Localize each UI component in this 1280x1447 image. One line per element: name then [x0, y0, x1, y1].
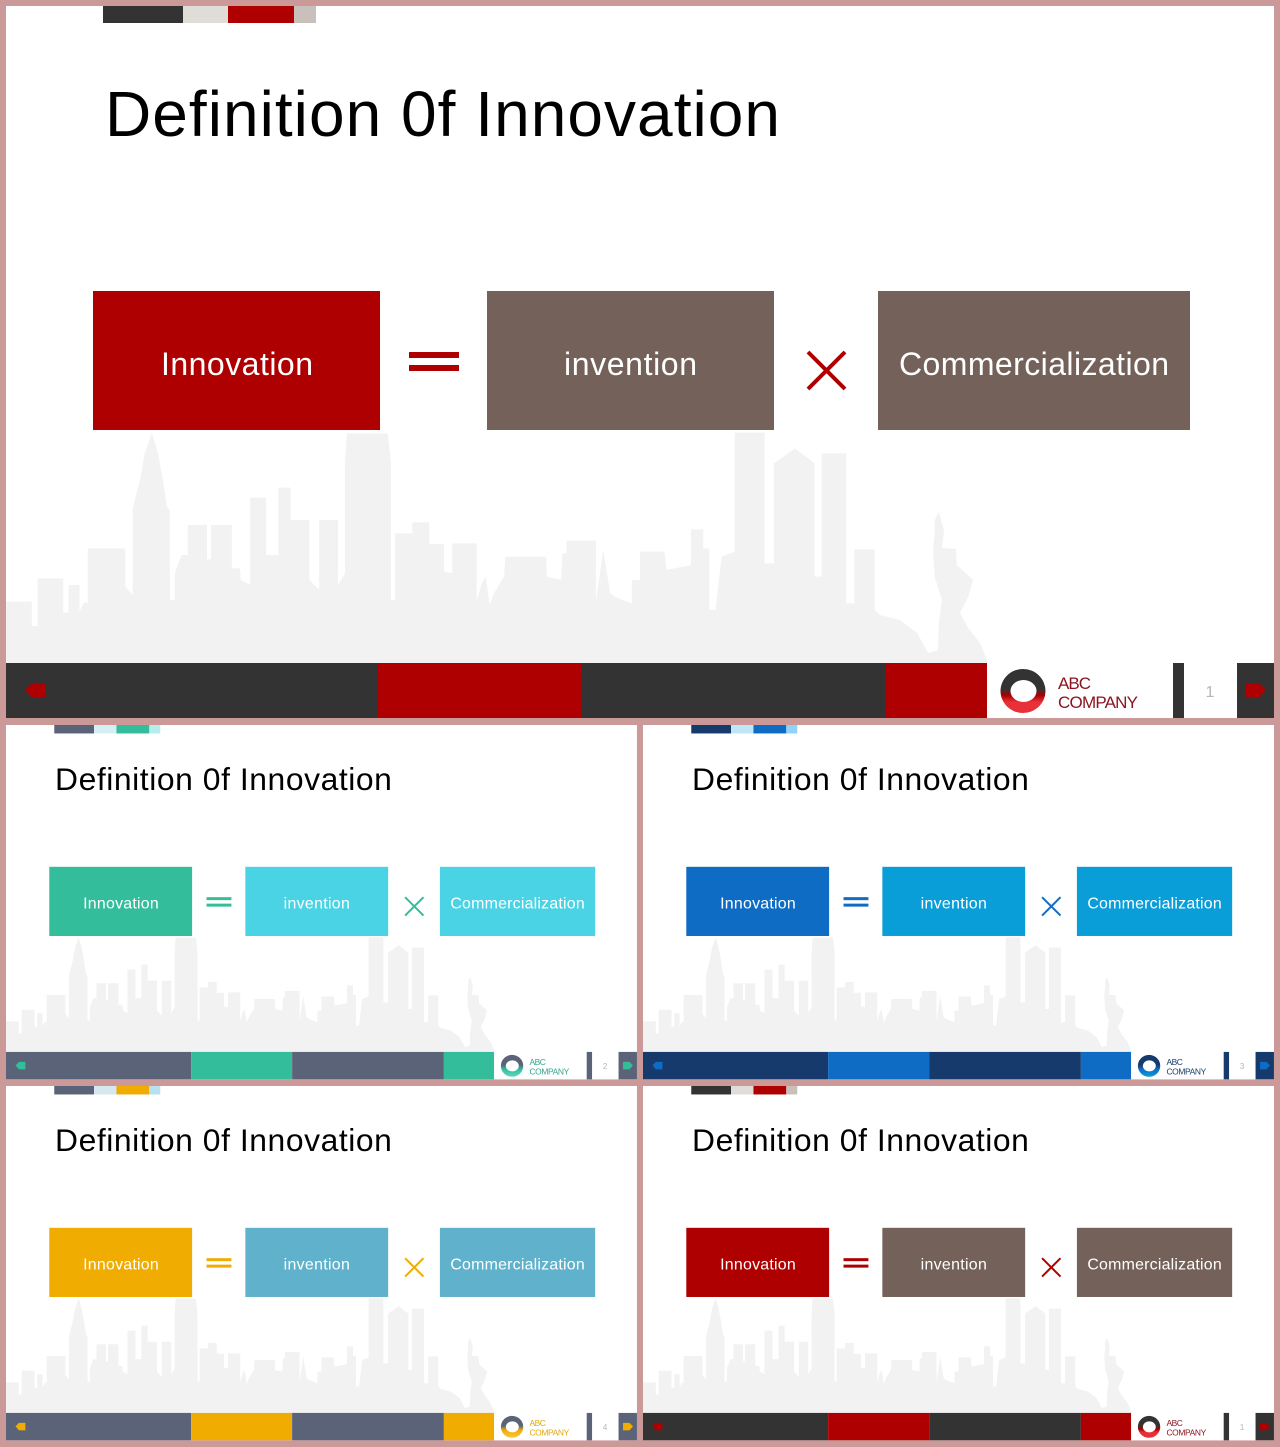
box: Commercialization: Commercialization: [450, 1257, 585, 1274]
box: Innovation: [49, 1228, 192, 1297]
title: Definition 0f Innovation: [105, 78, 780, 150]
box: Commercialization: [1077, 1228, 1232, 1297]
box: invention: invention: [284, 1257, 350, 1274]
box: invention: invention: [921, 896, 987, 913]
icon: multiply: [808, 352, 845, 389]
box: Commercialization: [440, 1228, 595, 1297]
top colour tab: [103, 6, 316, 23]
icon: company ring: [501, 1416, 523, 1438]
company name: [529, 1057, 570, 1076]
icon: left arrow: [15, 1062, 25, 1069]
top colour tab: [691, 1086, 797, 1094]
box: Commercialization: [440, 867, 595, 936]
box: Innovation: Innovation: [83, 1257, 159, 1274]
icon: left arrow: [15, 1423, 25, 1430]
box: Commercialization: [878, 291, 1190, 430]
skyline silhouette: [643, 937, 1132, 1052]
company name: COMPANY: [529, 1427, 570, 1437]
company name: [1058, 674, 1138, 712]
panel: thumbnail slide 4 (gold): [6, 1086, 637, 1440]
company name: [1166, 1418, 1207, 1437]
footer bar: [6, 663, 1274, 718]
footer bar: [6, 1413, 637, 1440]
box: Innovation: Innovation: [720, 896, 796, 913]
company name: COMPANY: [1166, 1066, 1207, 1076]
icon: multiply: [405, 1258, 423, 1277]
box: Innovation: [49, 867, 192, 936]
box: Commercialization: [1077, 867, 1232, 936]
page number: 3: [1240, 1062, 1245, 1071]
page number: 1: [1240, 1423, 1245, 1432]
top colour tab: [691, 725, 797, 733]
box: invention: invention: [921, 1257, 987, 1274]
box: Commercialization: Commercialization: [899, 346, 1169, 382]
icon: company ring: [1138, 1055, 1160, 1077]
company name: [529, 1418, 570, 1437]
icon: left arrow: [25, 683, 45, 698]
icon: equals: [409, 352, 459, 371]
icon: equals: [844, 897, 868, 907]
company name: [1166, 1057, 1207, 1076]
icon: left arrow: [652, 1423, 662, 1430]
icon: left arrow: [652, 1062, 662, 1069]
title: Definition 0f Innovation: [692, 761, 1029, 797]
icon: right arrow: [1260, 1423, 1270, 1430]
box: invention: [245, 1228, 388, 1297]
icon: right arrow: [623, 1423, 633, 1430]
box: Innovation: Innovation: [83, 896, 159, 913]
box: invention: invention: [284, 896, 350, 913]
footer bar: [643, 1413, 1274, 1440]
icon: right arrow: [1246, 683, 1266, 698]
company name: COMPANY: [529, 1066, 570, 1076]
top colour tab: [54, 1086, 160, 1094]
icon: equals: [207, 1258, 231, 1268]
box: invention: invention: [564, 346, 697, 382]
box: invention: [882, 1228, 1025, 1297]
company name: ABC: [529, 1418, 546, 1428]
icon: equals: [844, 1258, 868, 1268]
company name: COMPANY: [1166, 1427, 1207, 1437]
company name: COMPANY: [1058, 693, 1138, 712]
icon: multiply: [1042, 897, 1060, 916]
skyline silhouette: [6, 433, 988, 663]
box: invention: [245, 867, 388, 936]
title: Definition 0f Innovation: [692, 1122, 1029, 1158]
page number: 1: [1206, 684, 1215, 701]
company name: ABC: [1166, 1057, 1183, 1067]
panel: thumbnail slide 3 (blue): [643, 725, 1274, 1079]
icon: company ring: [501, 1055, 523, 1077]
box: invention: [487, 291, 774, 430]
company name: ABC: [529, 1057, 546, 1067]
box: Commercialization: Commercialization: [450, 896, 585, 913]
footer bar: [643, 1052, 1274, 1079]
page number: 2: [603, 1062, 608, 1071]
box: Commercialization: Commercialization: [1087, 1257, 1222, 1274]
icon: right arrow: [623, 1062, 633, 1069]
box: Innovation: [686, 1228, 829, 1297]
box: invention: [882, 867, 1025, 936]
box: Innovation: Innovation: [161, 346, 313, 382]
box: Innovation: Innovation: [720, 1257, 796, 1274]
company name: ABC: [1166, 1418, 1183, 1428]
panel: main slide (red): [6, 6, 1274, 718]
icon: company ring: [1000, 669, 1046, 713]
icon: company ring: [1138, 1416, 1160, 1438]
skyline silhouette: [643, 1298, 1132, 1413]
panel: thumbnail slide 5 (red): [643, 1086, 1274, 1440]
company name: ABC: [1058, 674, 1091, 693]
icon: multiply: [405, 897, 423, 916]
icon: multiply: [1042, 1258, 1060, 1277]
box: Commercialization: Commercialization: [1087, 896, 1222, 913]
skyline silhouette: [6, 1298, 495, 1413]
icon: right arrow: [1260, 1062, 1270, 1069]
title: Definition 0f Innovation: [55, 761, 392, 797]
top colour tab: [54, 725, 160, 733]
panel: thumbnail slide 2 (teal): [6, 725, 637, 1079]
footer bar: [6, 1052, 637, 1079]
title: Definition 0f Innovation: [55, 1122, 392, 1158]
box: Innovation: [686, 867, 829, 936]
icon: equals: [207, 897, 231, 907]
page number: 4: [603, 1423, 608, 1432]
skyline silhouette: [6, 937, 495, 1052]
box: Innovation: [93, 291, 380, 430]
